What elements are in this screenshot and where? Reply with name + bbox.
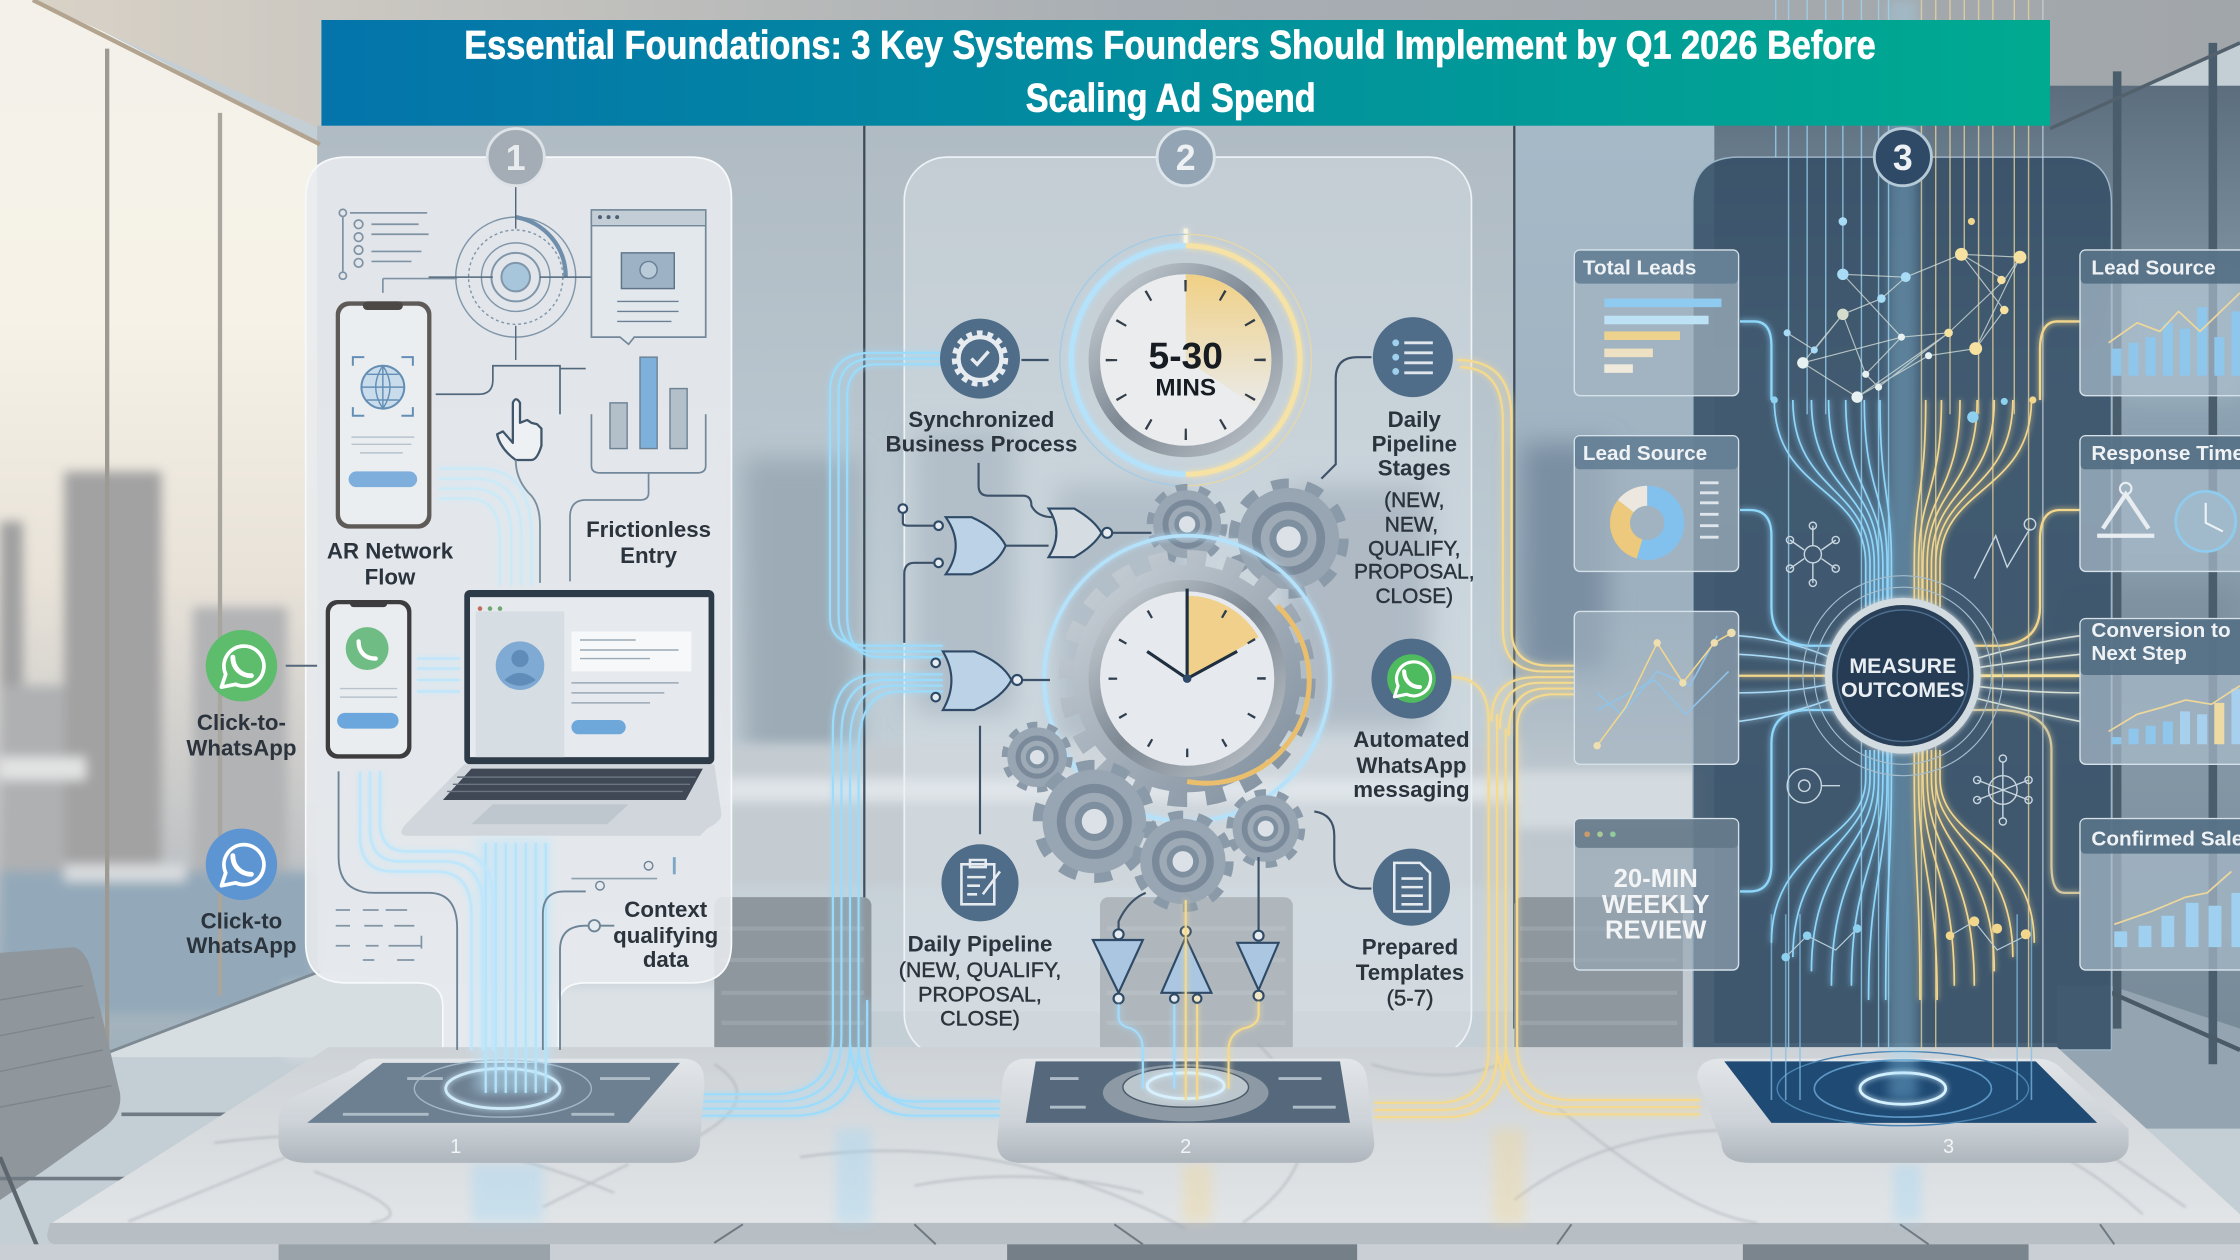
card: response time: Response Time [2091,442,2240,465]
number badge 1: 1 [506,138,526,178]
label: daily pipeline stages: NEW, [1385,513,1438,536]
label: daily pipeline stages: CLOSE) [1375,585,1453,608]
window: left glass [0,0,320,1053]
card: response time [2080,436,2240,571]
signal fans [1771,400,1891,1000]
measure outcomes hub: MEASURE [1849,654,1956,678]
label: AR Network Flow: AR Network [327,539,454,564]
label: prepared templates: Prepared [1362,934,1458,959]
number badge 3: 3 [1893,138,1913,178]
panel 3 glass [1693,157,2111,1050]
label: Click-to-WhatsApp: WhatsApp [186,736,296,761]
list schematic [339,209,457,293]
laptop [401,590,721,836]
browser card [591,210,706,344]
panel 1 contents [186,181,721,1093]
card: conversion: Conversion to [2091,619,2231,642]
bottom triangle gates [1093,926,1279,1004]
label: daily pipeline: (NEW, QUALIFY, [899,958,1061,982]
card: weekly review: WEEKLY [1602,891,1710,919]
label: daily pipeline stages: Stages [1378,456,1451,481]
label: automated whatsapp messaging: WhatsApp [1356,753,1466,778]
measure outcomes hub [1803,576,2003,776]
label: daily pipeline stages: (NEW, [1384,489,1444,512]
label: daily pipeline: PROPOSAL, [918,982,1042,1006]
label: Click-to-WhatsApp: Click-to- [197,710,286,735]
label: Frictionless Entry: Frictionless [586,517,711,542]
target diagram [429,181,591,360]
icon: pipeline stages [1373,317,1453,397]
label: Context qualifying data: data [643,947,689,972]
window: middle glass [317,126,1514,1011]
device 2 number: 2 [1180,1136,1191,1158]
label: daily pipeline: CLOSE) [940,1007,1020,1031]
blurred city skyline [743,271,2240,800]
gears lower [1006,726,1300,906]
number badge 1 [487,129,544,186]
small icons [1786,519,2036,825]
device 3 number: 3 [1943,1136,1954,1158]
device 1 number: 1 [450,1136,461,1158]
connector line [516,460,540,583]
label: prepared templates: Templates [1356,960,1464,985]
icon: WhatsApp green [206,630,277,701]
label: daily pipeline: Daily Pipeline [908,931,1052,956]
card: conversion: Next Step [2091,642,2187,665]
top clock: MINS [1155,375,1216,402]
label: AR Network Flow: Flow [365,564,416,589]
circuit from phone to target [436,366,586,414]
lower network nodes [1781,916,2031,961]
label: Context qualifying data: qualifying [613,923,718,948]
measure outcomes hub: OUTCOMES [1841,678,1965,702]
card: conversion [2080,619,2240,764]
marble table [0,1043,2240,1260]
connector [286,665,317,667]
icon: automated whatsapp [1371,639,1451,719]
flow: phone to laptop [439,469,531,586]
card: lead source donut: Lead Source [1583,442,1707,465]
flow: phone to laptop short [417,659,460,691]
panel 2 glass [904,157,1471,1057]
device 2 [997,1059,1374,1163]
connector flows: blue group [686,353,1000,1116]
label: Click-to WhatsApp: Click-to [201,909,282,934]
card: right lead source [2080,250,2240,396]
chair left [0,947,286,1260]
label: synchronized business process: Business Process [886,431,1077,456]
card: total leads: Total Leads [1583,256,1696,279]
table legs [0,1244,2240,1260]
icon: document [1373,849,1450,926]
label: Click-to WhatsApp: WhatsApp [186,933,296,958]
label: automated whatsapp messaging: Automated [1353,727,1470,752]
panel 2 contents [886,229,1475,1100]
flows into device 2 [1119,900,1259,1100]
ceiling [33,0,2240,129]
circuit lines below phone [336,771,674,1050]
card: weekly review [1574,819,1739,970]
top clock [1060,229,1311,486]
number badge 2: 2 [1176,138,1196,178]
floor right [2057,986,2240,1129]
device 3 [1697,1051,2129,1163]
label: Context qualifying data: Context [624,897,708,922]
icon: synchronized process [940,319,1020,399]
label: synchronized business process: Synchronized [908,407,1054,432]
icon: WhatsApp blue [206,829,277,900]
beam to device 1 [474,836,551,1093]
conference table and far wall blur [286,743,1700,1057]
label: daily pipeline stages: QUALIFY, [1368,538,1460,561]
phone: WhatsApp [326,600,411,759]
left skyline [0,471,314,1014]
phone: AR network [336,301,431,529]
connectors from cards [1739,321,2080,893]
vertical data beams [1776,0,2043,1050]
device 1 [279,1059,704,1163]
window: right of panel two [1514,86,1714,1043]
mini bar chart [570,357,706,581]
window: far right glass [1714,86,2240,1043]
title banner [321,20,2050,126]
number badge 3 [1874,129,1931,186]
card: lead source donut [1574,436,1739,571]
icon: pointer hand [497,399,541,460]
title line 2: Scaling Ad Spend [1026,76,1316,120]
table front edge [47,1223,2240,1244]
chairs at the far table [714,897,1683,1054]
progress halo [1071,229,1300,474]
main clock with gears [1044,536,1330,821]
reflections on the table [471,1129,1921,1223]
network graph [1771,217,2036,423]
card: total leads [1574,250,1739,396]
number badge 2 [1157,129,1214,186]
connector flows: yellow group [1374,360,1700,1117]
card: line chart [1574,611,1739,764]
label: Frictionless Entry: Entry [620,543,678,568]
card: weekly review: REVIEW [1605,917,1707,945]
panel 1 glass [306,157,731,1050]
floor left [0,971,471,1057]
card: weekly review: 20-MIN [1614,865,1698,893]
logic gates [899,504,1112,710]
label: daily pipeline stages: Pipeline [1372,431,1457,456]
label: automated whatsapp messaging: messaging [1353,777,1470,802]
signal fans yellow [1914,400,2034,1000]
circuit wires [903,357,1371,936]
label: daily pipeline stages: PROPOSAL, [1354,561,1475,584]
icon: clipboard [941,844,1019,921]
card: right lead source: Lead Source [2091,256,2216,279]
label: daily pipeline stages: Daily [1388,407,1442,432]
panel 3 contents [1574,0,2240,1100]
clock text: 5-30 [1149,335,1223,377]
title line 1: Essential Foundations: 3 Key Systems Founders Should Implement by Q1 2026 Before [464,24,1876,68]
label: prepared templates: (5-7) [1386,986,1434,1011]
gears upper [1152,486,1341,591]
card: confirmed sales [2080,819,2240,970]
